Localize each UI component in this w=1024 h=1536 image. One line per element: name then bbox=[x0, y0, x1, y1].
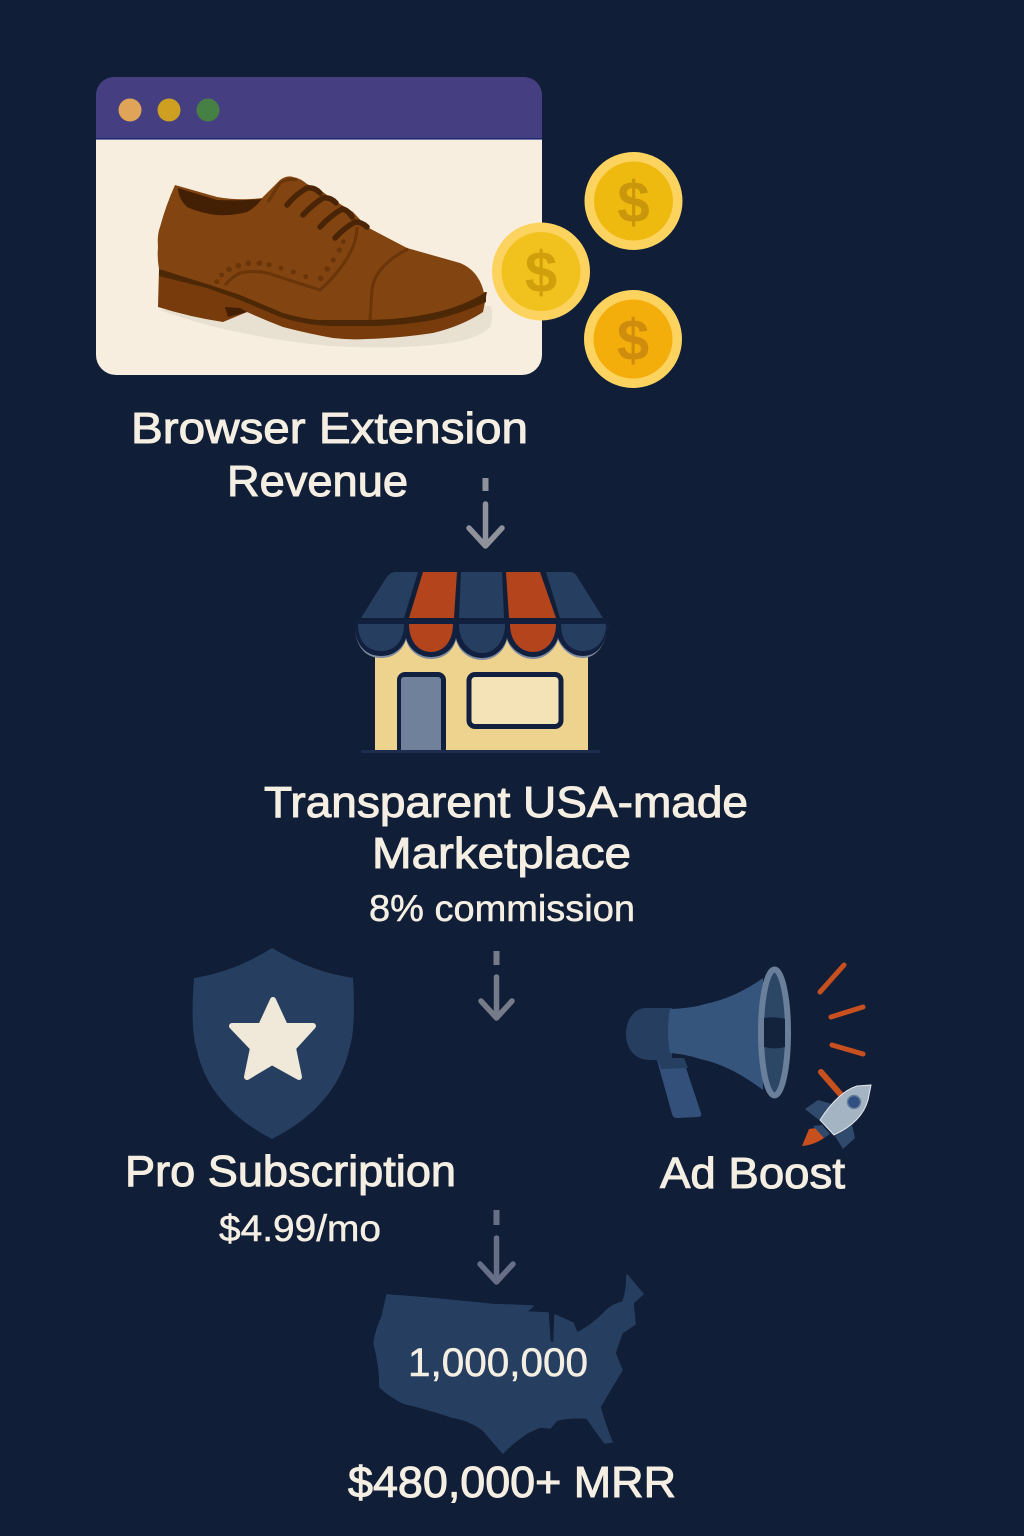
shoe laces bbox=[287, 188, 367, 238]
striped awning bbox=[355, 572, 609, 660]
heading: browser extension revenue bbox=[131, 404, 528, 506]
heading: browser extension revenue: Revenue bbox=[227, 457, 408, 506]
arrow: marketplace to tiers bbox=[481, 951, 512, 1018]
heading: browser extension revenue: Browser Extension bbox=[131, 404, 528, 453]
icon: gold coin middle: $ bbox=[525, 240, 557, 305]
stat: monthly recurring revenue: $480,000+ MRR bbox=[348, 1458, 676, 1507]
icon: gold coin top bbox=[584, 152, 682, 250]
icon: megaphone bbox=[626, 970, 788, 1118]
text: 8% commission: 8% commission bbox=[369, 888, 635, 929]
icon: brown shoe bbox=[158, 176, 492, 348]
ground line bbox=[361, 750, 600, 753]
rim bbox=[761, 970, 788, 1096]
icon: rocket bbox=[802, 1085, 871, 1149]
icon: gold coin top: $ bbox=[617, 170, 650, 235]
label: ad boost: Ad Boost bbox=[660, 1149, 845, 1198]
browser body bbox=[96, 138, 542, 375]
icon: shield with star bbox=[193, 948, 354, 1139]
horn bbox=[668, 978, 763, 1090]
icon: gold coin bottom: $ bbox=[617, 308, 649, 373]
back cap bbox=[626, 1008, 672, 1060]
browser title bar bbox=[96, 77, 542, 139]
map: USA silhouette bbox=[374, 1275, 643, 1453]
icon: orange signal rays bbox=[820, 965, 863, 1096]
heading: transparent USA-made marketplace bbox=[264, 778, 748, 878]
shop window bbox=[469, 674, 561, 726]
arrow: tiers to outcome bbox=[480, 1210, 513, 1282]
window control dots bbox=[118, 98, 220, 122]
panel: browser window with shoe bbox=[96, 77, 542, 375]
handle bbox=[657, 1060, 701, 1118]
stat: one million: 1,000,000 bbox=[408, 1341, 588, 1385]
heading: transparent USA-made marketplace: Marketplace bbox=[372, 829, 631, 878]
text: price per month: $4.99/mo bbox=[219, 1208, 381, 1249]
label: pro subscription: Pro Subscription bbox=[125, 1147, 456, 1196]
icon: gold coin bottom bbox=[584, 290, 682, 388]
door bbox=[397, 672, 446, 750]
icon: gold coin middle bbox=[492, 222, 590, 320]
arrow: revenue to marketplace bbox=[469, 478, 502, 546]
brogue stitching dots bbox=[214, 239, 346, 284]
star bbox=[232, 1000, 313, 1077]
building wall bbox=[375, 640, 588, 750]
icon: storefront bbox=[355, 572, 609, 753]
heading: transparent USA-made marketplace: Transparent USA-made bbox=[264, 778, 748, 827]
